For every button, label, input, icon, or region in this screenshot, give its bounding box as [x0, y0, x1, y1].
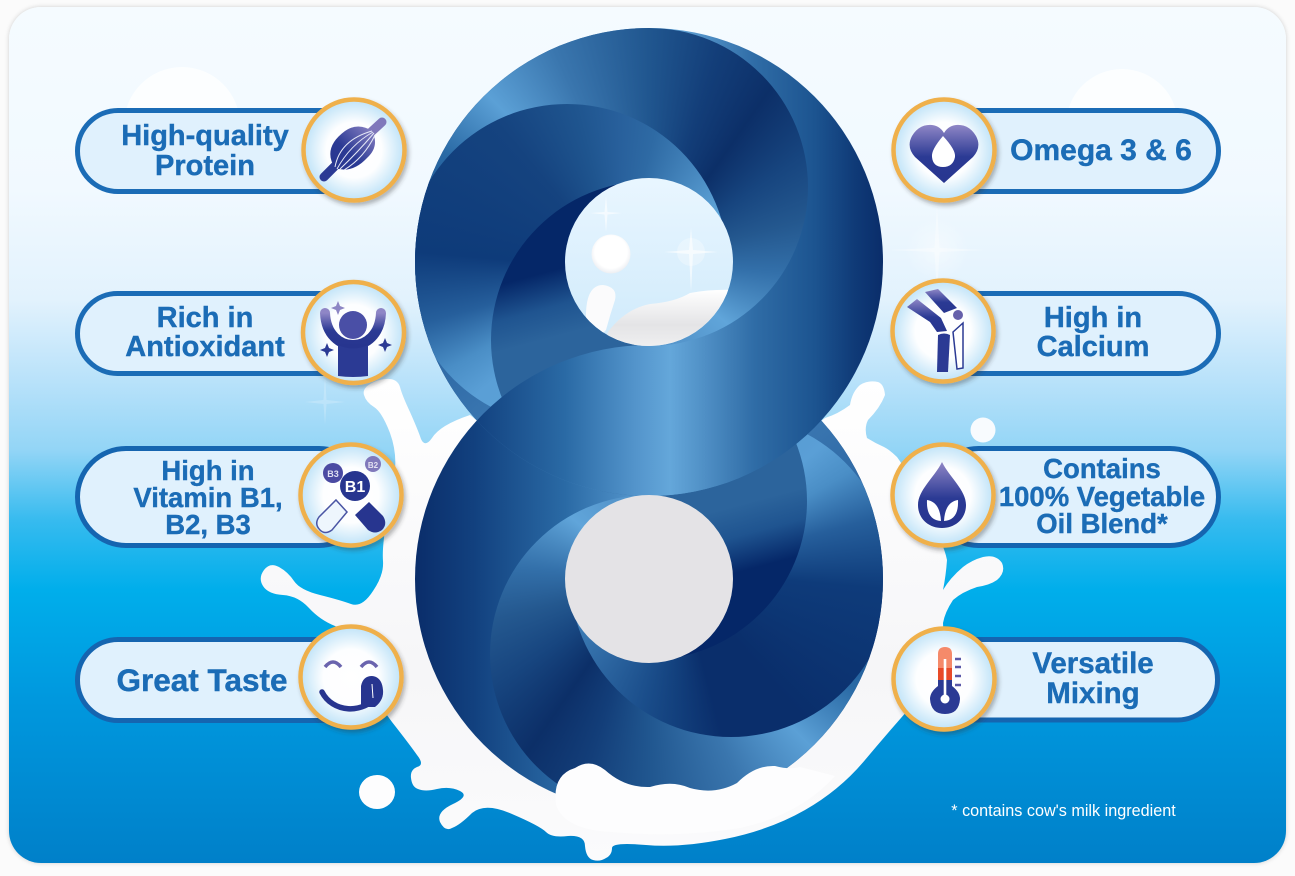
icon: smiling face with tongue [300, 626, 402, 728]
milk wave over the eight [555, 763, 835, 834]
icon: knee joint [892, 280, 994, 382]
icon: heart with drop [894, 100, 994, 200]
icon: muscle [304, 100, 404, 200]
pill: Great Taste: Great Taste [116, 662, 288, 698]
pill: High-quality Protein: Protein [155, 150, 255, 182]
pill: High-quality Protein: High-quality [121, 120, 289, 152]
icon: vitamin capsules: B3 [327, 469, 339, 479]
pill: Rich in Antioxidant: Antioxidant [125, 331, 285, 363]
icon: vitamin capsules: B1 [345, 479, 365, 496]
pill: High in Vitamin B1, B2, B3: Vitamin B1, [133, 482, 283, 513]
pill: Rich in Antioxidant [78, 294, 368, 374]
pill: High in Calcium [930, 294, 1218, 374]
pill: High in Vitamin B1, B2, B3 [78, 448, 368, 546]
pill: Contains 100% Vegetable Oil Blend: 100% Vegetable [999, 481, 1205, 512]
pill: Versatile Mixing: Versatile [1032, 647, 1154, 680]
icon: thermometer [894, 628, 994, 730]
icon: oil drop with leaves [892, 444, 994, 546]
pill: High in Calcium: High in [1044, 302, 1142, 334]
pill: High in Calcium: Calcium [1037, 331, 1149, 363]
pill: Rich in Antioxidant: Rich in [157, 302, 253, 334]
figure eight: upper loop [415, 28, 883, 496]
icon: vitamin capsules [300, 444, 402, 546]
pill: Omega 3 & 6: Omega 3 & 6 [1010, 134, 1192, 167]
pill: High in Vitamin B1, B2, B3: B2, B3 [165, 509, 251, 540]
pill: Omega 3 & 6 [930, 110, 1218, 192]
pill: High-quality Protein [78, 110, 368, 192]
pill: Contains 100% Vegetable Oil Blend: Contains [1043, 453, 1161, 484]
top hole of the eight with milk [565, 178, 733, 346]
pill: Contains 100% Vegetable Oil Blend [930, 448, 1218, 546]
pill: Contains 100% Vegetable Oil Blend: Oil Blend* [1036, 508, 1168, 539]
foreground overlay [75, 97, 1221, 820]
bottom hole of the eight [565, 495, 733, 663]
icon: vitamin capsules: B2 [368, 461, 379, 470]
pill: Versatile Mixing: Mixing [1046, 677, 1140, 710]
pill: High in Vitamin B1, B2, B3: High in [161, 455, 255, 486]
figure eight: lower loop [415, 420, 883, 794]
pill: Versatile Mixing [930, 640, 1218, 720]
icon: person with raised arms [303, 282, 404, 383]
footnote: * contains cow's milk ingredient [951, 802, 1176, 820]
pill: Great Taste [78, 640, 368, 720]
